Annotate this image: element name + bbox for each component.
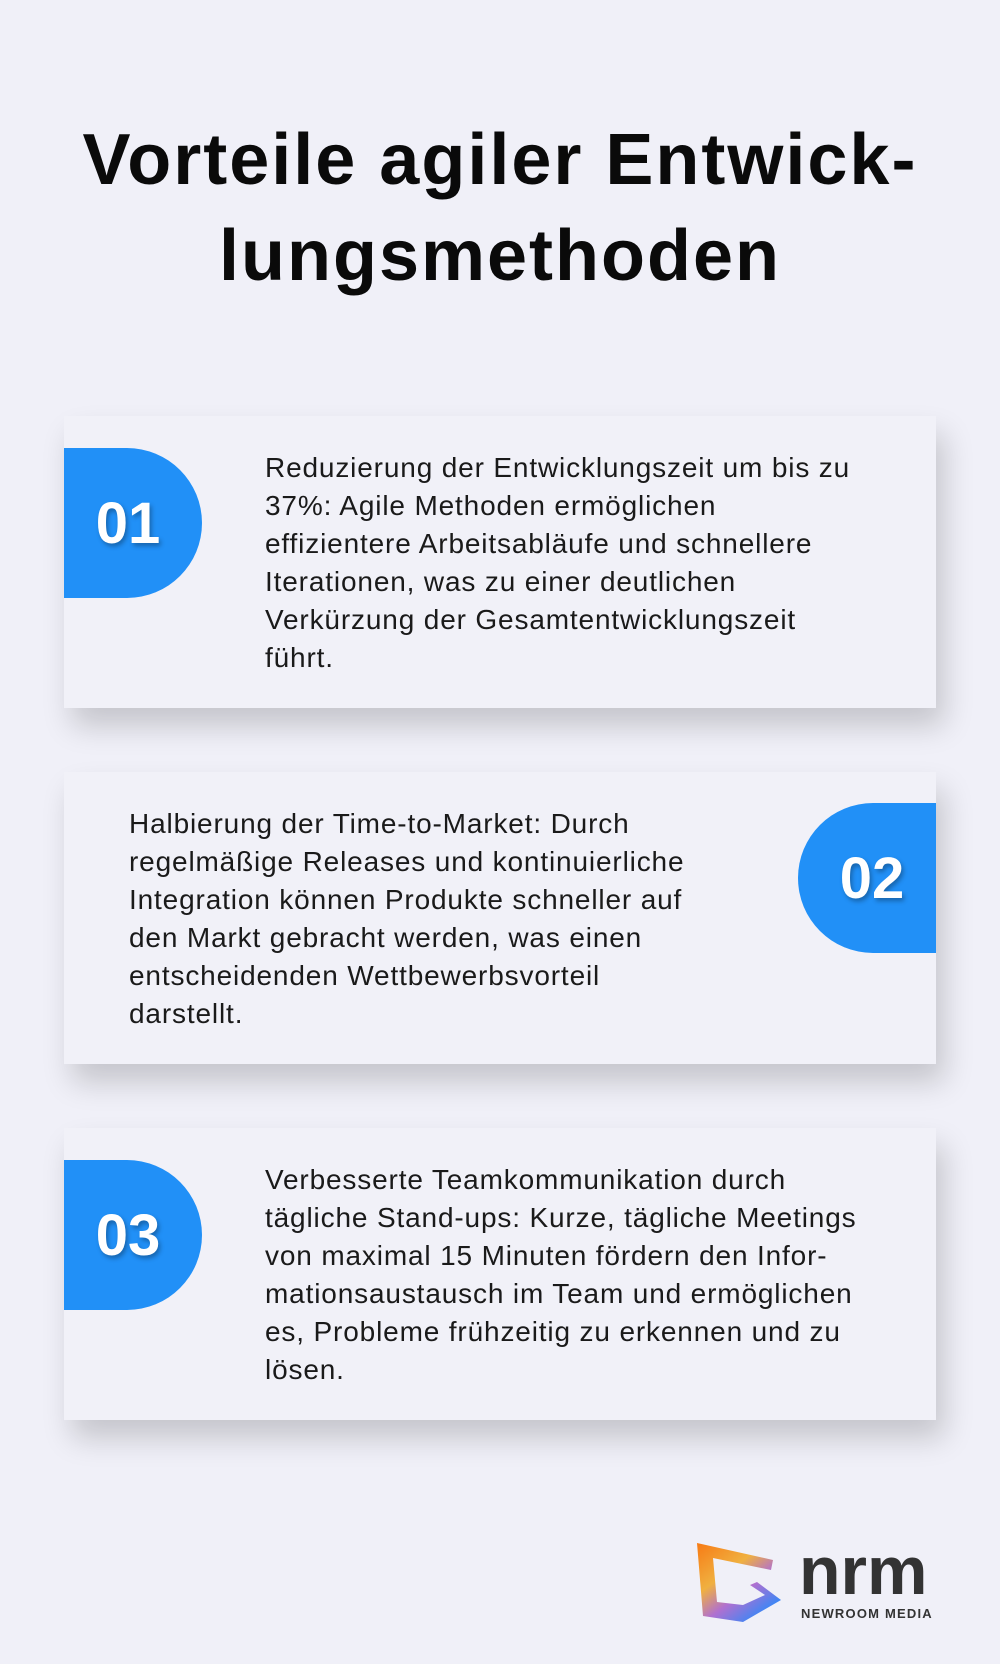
text 01: Verkürzung der Gesamtentwicklungszeit: [265, 604, 796, 635]
icon: logo mark: [697, 1543, 781, 1622]
text 02: Integration können Produkte schneller auf: [129, 884, 682, 915]
text 03: [265, 1164, 856, 1385]
text 03: lösen.: [265, 1354, 345, 1385]
panel: card 01: [64, 416, 936, 708]
text 03: mationsaustausch im Team und ermöglichen: [265, 1278, 853, 1309]
text 03: von maximal 15 Minuten fördern den Infor-: [265, 1240, 827, 1271]
text 03: tägliche Stand-ups: Kurze, tägliche Meetings: [265, 1202, 856, 1233]
logo: NEWROOM MEDIA: [801, 1606, 933, 1621]
text 01: Reduzierung der Entwicklungszeit um bis zu: [265, 452, 850, 483]
text 02: entscheidenden Wettbewerbsvorteil: [129, 960, 600, 991]
text 02: [129, 808, 684, 1029]
logo text: nrm: [799, 1533, 927, 1609]
text 01: [265, 452, 850, 673]
badge 02: 02: [840, 846, 904, 910]
title: Vorteile agiler Entwick-: [83, 120, 917, 200]
badge 03: [64, 1160, 202, 1310]
badge 01: 01: [96, 490, 160, 556]
title: lungsmethoden: [219, 216, 781, 296]
text 01: effizientere Arbeitsabläufe und schnellere: [265, 528, 812, 559]
text 03: Verbesserte Teamkommunikation durch: [265, 1164, 786, 1195]
text 02: den Markt gebracht werden, was einen: [129, 922, 642, 953]
badge 03: 03: [96, 1202, 160, 1268]
text 01: 37%: Agile Methoden ermöglichen: [265, 490, 716, 521]
panel: card 02: [64, 772, 936, 1064]
title: [83, 120, 917, 296]
panel: card 03: [64, 1128, 936, 1420]
text 01: Iterationen, was zu einer deutlichen: [265, 566, 736, 597]
text 02: Halbierung der Time-to-Market: Durch: [129, 808, 630, 839]
text 03: es, Probleme frühzeitig zu erkennen und zu: [265, 1316, 841, 1347]
badge 02: [798, 803, 936, 953]
text 01: führt.: [265, 642, 334, 673]
text 02: regelmäßige Releases und kontinuierliche: [129, 846, 684, 877]
logo: [697, 1533, 933, 1622]
badge 01: [64, 448, 202, 598]
text 02: darstellt.: [129, 998, 243, 1029]
